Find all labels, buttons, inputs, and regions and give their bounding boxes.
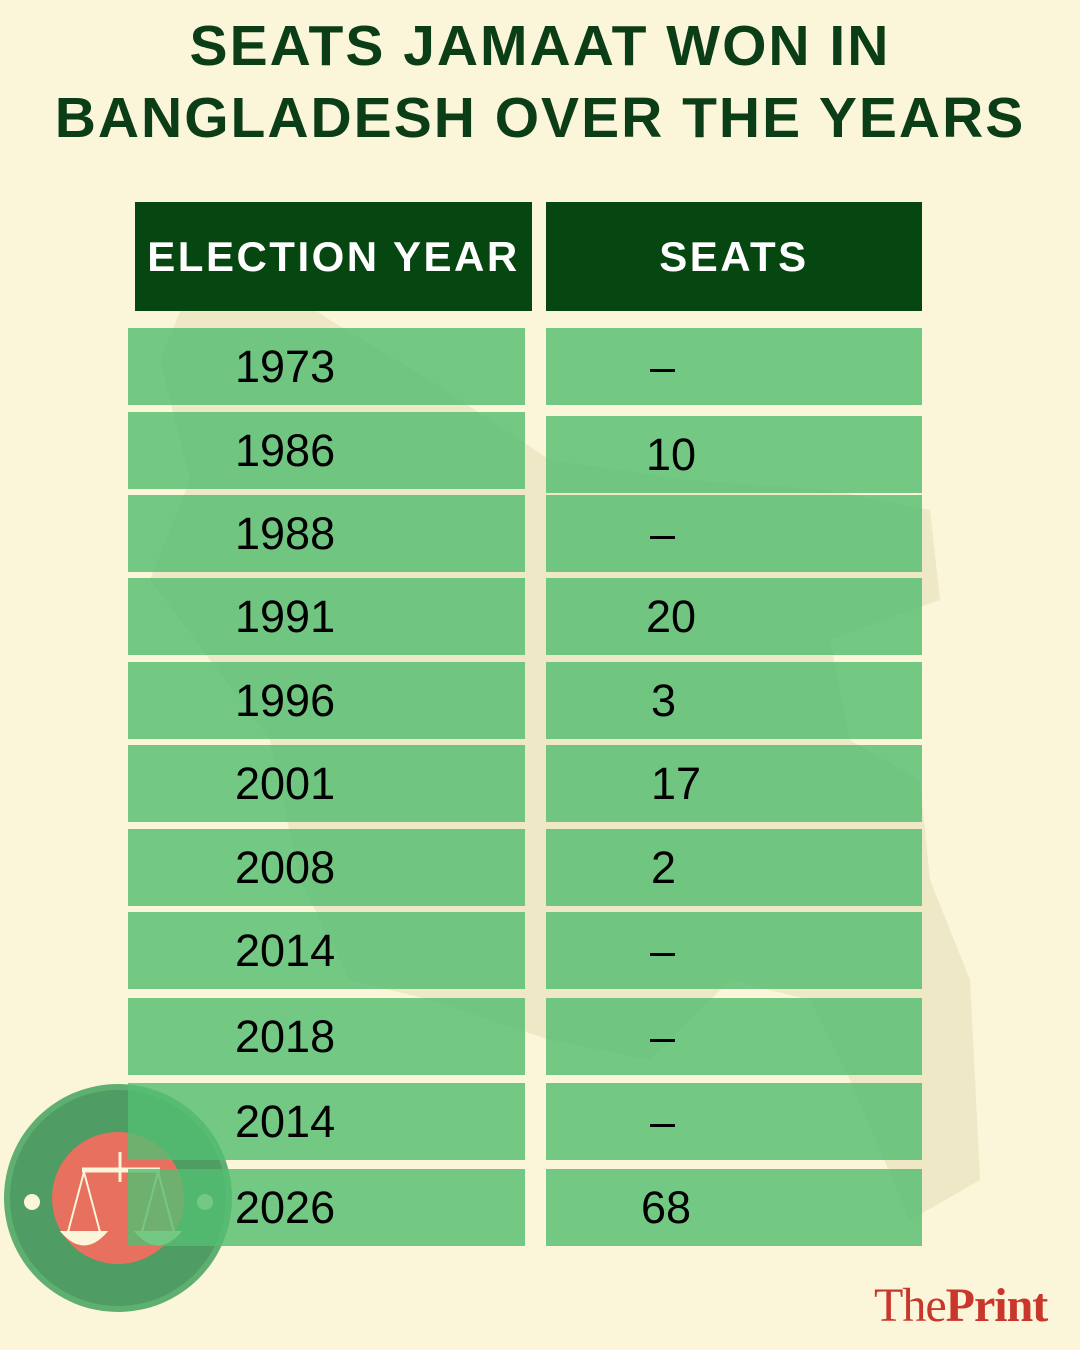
text: 2008 xyxy=(235,842,335,892)
text: 2 xyxy=(651,842,676,892)
text: 1973 xyxy=(235,340,335,392)
text: 2014 xyxy=(235,924,335,976)
text: 10 xyxy=(646,428,696,480)
title: SEATS JAMAAT WON IN xyxy=(190,14,890,78)
text: 20 xyxy=(646,590,696,642)
text: 2001 xyxy=(235,758,335,808)
text: 17 xyxy=(651,758,701,808)
text: – xyxy=(650,508,675,558)
text: 3 xyxy=(651,674,676,726)
text: 1986 xyxy=(235,424,335,476)
text: – xyxy=(650,1010,675,1062)
title: BANGLADESH OVER THE YEARS xyxy=(55,86,1025,150)
header: seats: SEATS xyxy=(659,232,809,280)
text: 1991 xyxy=(235,590,335,642)
text: 1996 xyxy=(235,674,335,726)
text: – xyxy=(650,340,675,392)
table rows xyxy=(128,328,922,1246)
text: – xyxy=(650,1096,675,1146)
header: election year: ELECTION YEAR xyxy=(147,232,520,280)
text: 68 xyxy=(641,1182,691,1232)
text: 2014 xyxy=(235,1096,335,1146)
header: election year xyxy=(135,202,532,311)
text: 1988 xyxy=(235,508,335,558)
header: seats xyxy=(546,202,922,311)
text: – xyxy=(650,924,675,976)
text: 2026 xyxy=(235,1182,335,1232)
title xyxy=(55,14,1025,150)
text: 2018 xyxy=(235,1010,335,1062)
ThePrint logo: ThePrint xyxy=(874,1279,1047,1332)
logo xyxy=(4,1084,232,1312)
background map xyxy=(151,311,980,1213)
